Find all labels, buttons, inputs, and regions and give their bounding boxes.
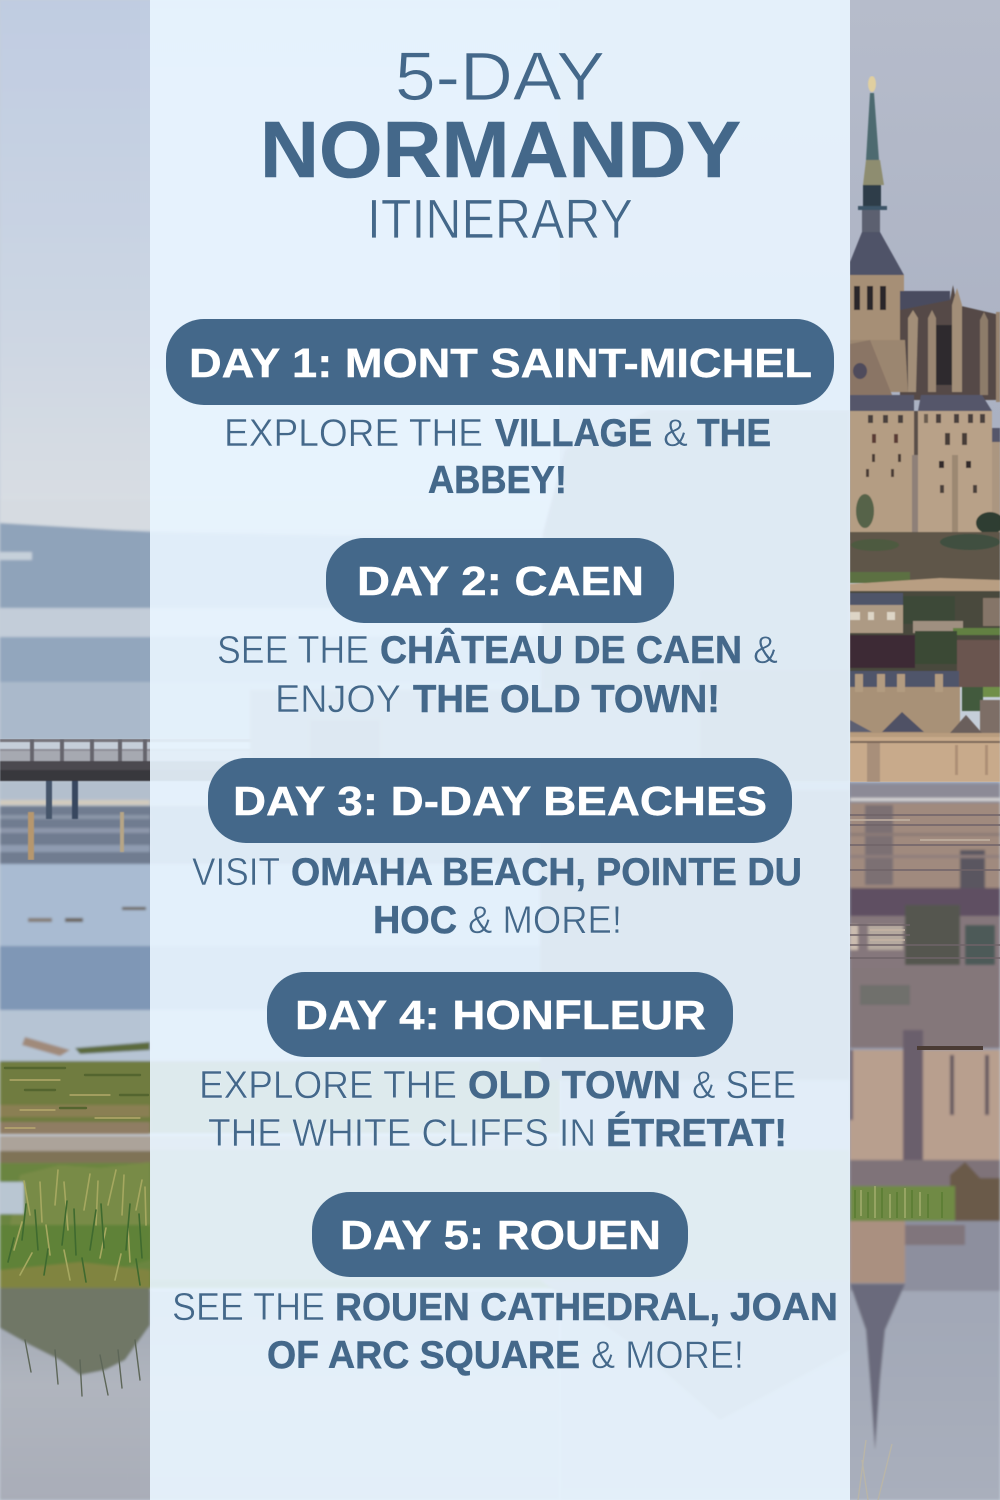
text: day 1 description: VILLAGE [495, 412, 652, 455]
icon: spire [858, 76, 887, 238]
text: day 5 description: ROUEN CATHEDRAL, [335, 1286, 720, 1329]
background photo: left strip with sky, water and grass [0, 0, 560, 1500]
background photo: water and reflection on the right [560, 782, 1000, 1500]
text: day 3 description: OMAHA BEACH, [291, 851, 586, 894]
ghost of the mount through the panel [150, 410, 850, 1420]
trees [850, 635, 915, 668]
text: day 3 description: HOC [373, 899, 457, 942]
pill: day 1 heading [166, 319, 834, 405]
text: day 3 description: & MORE! [468, 899, 622, 942]
day 1 [166, 319, 834, 502]
text: day 1 description: & [663, 412, 688, 455]
text: day 5 description: JOAN [730, 1286, 838, 1329]
text: day 4 description: EXPLORE THE [199, 1064, 457, 1107]
text: day 2 description: THE OLD TOWN! [413, 678, 720, 721]
gothic buttresses [900, 285, 1000, 400]
pill: day 4 heading [267, 972, 733, 1057]
grass tufts on the left [5, 1068, 148, 1396]
day 5 [172, 1192, 838, 1377]
pill: day 3 heading: DAY 3: D-DAY BEACHES [233, 778, 767, 824]
text: day 2 description: ENJOY [275, 678, 401, 721]
pill: day 5 heading: DAY 5: ROUEN [340, 1212, 661, 1258]
text: day 1 description: EXPLORE THE [224, 412, 483, 455]
translucent centre panel [150, 0, 850, 1500]
text: day 4 description: OLD TOWN [468, 1064, 681, 1107]
text: day 2 description: SEE THE [217, 629, 369, 672]
reflection streaks on the right [850, 815, 1000, 1500]
text: day 2 description: CHÂTEAU DE CAEN [380, 628, 742, 672]
pill: day 5 heading [312, 1192, 688, 1277]
abbey of Mont Saint-Michel, right strip [850, 76, 1000, 782]
pill: day 2 heading [326, 538, 674, 623]
text: day 5 description: & MORE! [591, 1334, 744, 1377]
text: day 2 description: & [753, 629, 778, 672]
rampart [850, 733, 1000, 782]
title [260, 38, 741, 250]
background photo: sky behind the abbey [560, 0, 1000, 540]
text: day 4 description: THE WHITE CLIFFS IN [208, 1112, 596, 1155]
text: day 1 description: ABBEY! [428, 459, 567, 502]
village houses upper [850, 593, 903, 605]
day 4 [199, 972, 796, 1155]
text: day 1 description: THE [697, 412, 771, 455]
text: day 3 description: VISIT [192, 851, 280, 894]
heading line: 5-DAY: 5-DAY [395, 38, 605, 115]
hillside vegetation [850, 532, 1000, 580]
village houses lower [850, 671, 959, 687]
bridge on the left [0, 739, 340, 860]
pill: day 1 heading: DAY 1: MONT SAINT-MICHEL [189, 340, 812, 386]
text: day 4 description: & SEE [692, 1064, 796, 1107]
text: day 3 description: POINTE DU [596, 851, 802, 894]
pill: day 3 heading [208, 758, 792, 843]
abbey walls [850, 411, 914, 533]
heading line: ITINERARY: ITINERARY [367, 187, 633, 250]
pill: day 4 heading: DAY 4: HONFLEUR [295, 992, 706, 1038]
day 3 [192, 758, 802, 942]
text: day 4 description: ÉTRETAT! [606, 1111, 787, 1155]
text: day 5 description: SEE THE [172, 1286, 325, 1329]
day 2 [217, 538, 778, 721]
abbey roofs [850, 395, 914, 411]
pill: day 2 heading: DAY 2: CAEN [357, 558, 644, 604]
text: day 5 description: OF ARC SQUARE [267, 1334, 580, 1377]
heading line: NORMANDY: NORMANDY [260, 105, 741, 194]
